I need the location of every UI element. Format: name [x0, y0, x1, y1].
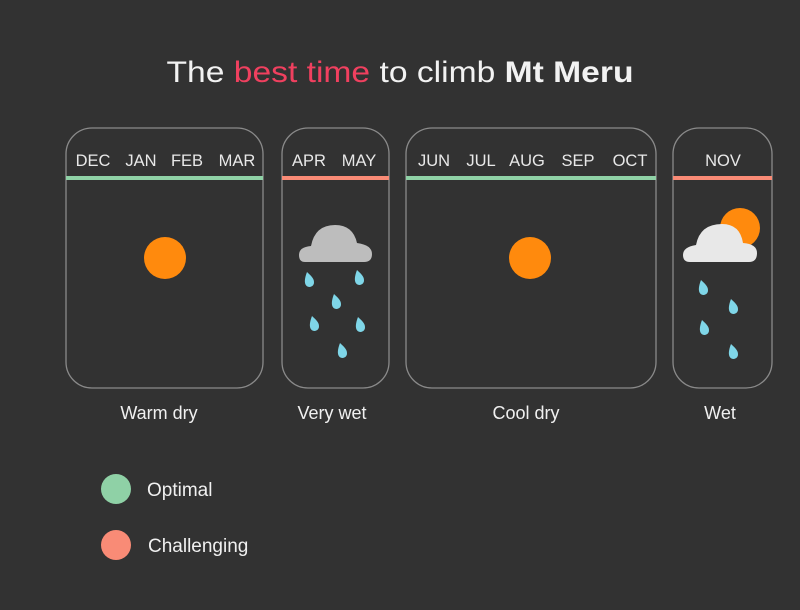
months: jun-oct: SEP	[561, 152, 595, 170]
title: The best time to climb Mt Meru	[166, 56, 634, 89]
legend: challenging	[101, 530, 248, 560]
label: warm dry: Warm dry	[120, 403, 198, 423]
panel: cool dry	[406, 128, 656, 388]
legend: optimal: Optimal	[147, 480, 212, 501]
months: dec-mar	[76, 152, 255, 170]
months: jun-oct: JUL	[466, 152, 496, 170]
legend: optimal	[101, 474, 212, 504]
months: dec-mar: FEB	[171, 152, 203, 170]
panel: very wet	[282, 128, 389, 388]
icon: sun	[509, 237, 551, 279]
months: nov: NOV	[705, 152, 741, 170]
months: apr-may: APR	[292, 152, 326, 170]
icon: sun behind cloud	[683, 208, 760, 359]
months: jun-oct: JUN	[418, 152, 450, 170]
legend: challenging: Challenging	[148, 536, 248, 557]
panel: warm dry	[66, 128, 263, 388]
months: apr-may: MAY	[342, 152, 376, 170]
months: dec-mar: MAR	[219, 152, 255, 170]
months: jun-oct	[418, 152, 647, 170]
icon: sun	[144, 237, 186, 279]
months: apr-may	[292, 152, 376, 170]
panel: wet	[673, 128, 772, 388]
months: dec-mar: DEC	[76, 152, 110, 170]
months: jun-oct: OCT	[613, 152, 647, 170]
label: wet: Wet	[704, 403, 736, 423]
months: dec-mar: JAN	[125, 152, 157, 170]
icon: rain cloud	[299, 225, 372, 358]
months: jun-oct: AUG	[509, 152, 545, 170]
label: very wet: Very wet	[297, 403, 367, 423]
label: cool dry: Cool dry	[492, 403, 560, 423]
